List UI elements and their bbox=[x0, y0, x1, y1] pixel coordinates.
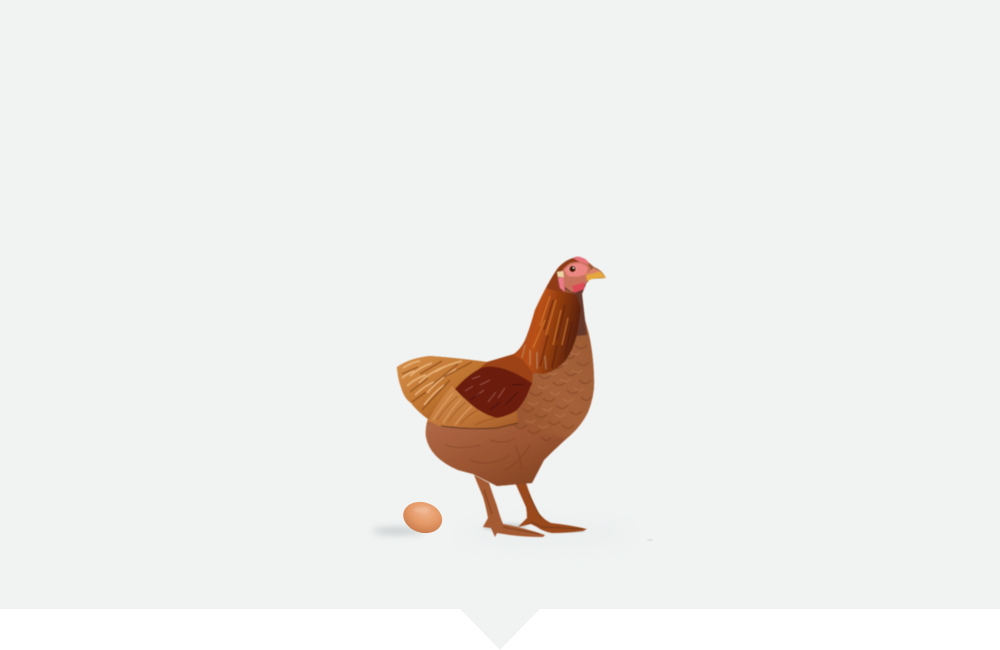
leg details bbox=[484, 490, 583, 534]
wing upper shoulder bbox=[476, 354, 534, 386]
neck front feathers bbox=[564, 284, 587, 336]
cheek wattle bbox=[558, 277, 565, 292]
ground shadows bbox=[372, 524, 653, 541]
icon: hen bbox=[390, 250, 610, 537]
comb bbox=[573, 256, 589, 264]
breast scale pattern bbox=[515, 345, 591, 440]
throat wattle bbox=[572, 282, 585, 293]
breast bbox=[516, 330, 594, 440]
eye bbox=[568, 265, 577, 273]
far leg bbox=[513, 478, 587, 533]
tail bbox=[396, 356, 487, 424]
silhouette base bbox=[390, 250, 610, 490]
crown bbox=[546, 258, 579, 294]
belly feather strokes bbox=[445, 438, 530, 470]
white footer band bbox=[0, 609, 1000, 650]
lower belly bbox=[425, 422, 566, 486]
pointer triangle bbox=[460, 609, 540, 650]
wing dark patch bbox=[455, 367, 532, 418]
wing lower feathers bbox=[428, 386, 518, 429]
ear lobe bbox=[557, 271, 564, 277]
face bbox=[560, 262, 592, 292]
neck hackles bbox=[512, 266, 581, 374]
head bbox=[546, 256, 592, 294]
near leg bbox=[474, 475, 545, 537]
beak bbox=[586, 268, 606, 281]
icon: egg bbox=[399, 497, 446, 538]
